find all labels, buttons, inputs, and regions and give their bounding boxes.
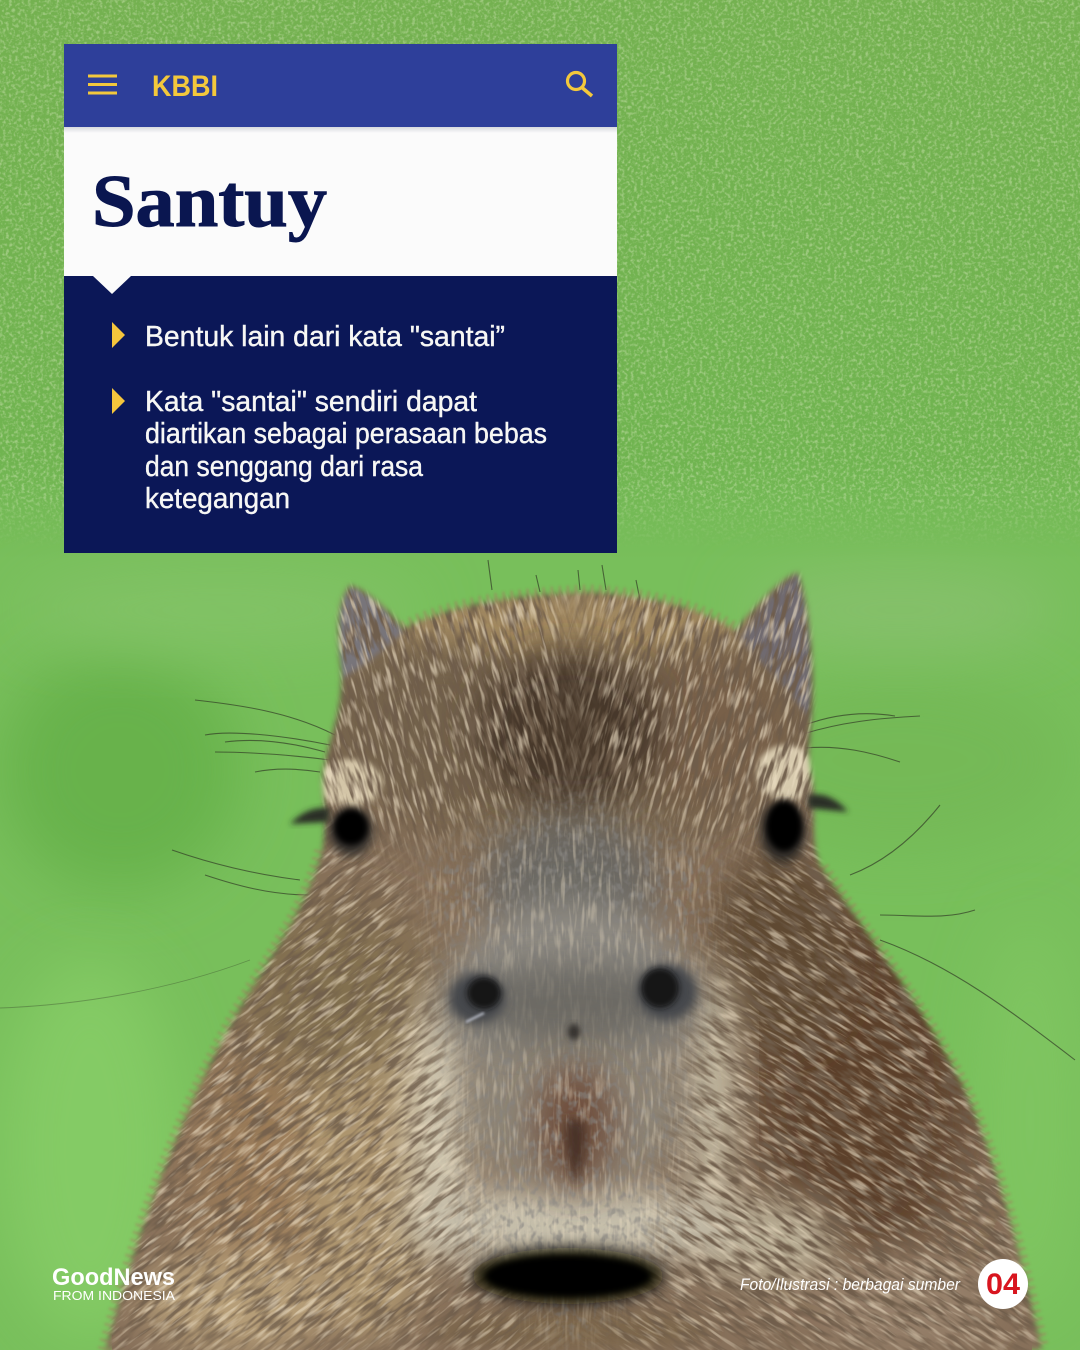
title panel (64, 127, 617, 276)
whiskers and stray hairs (0, 560, 1075, 1060)
app card (64, 44, 617, 553)
logo: GoodNews from Indonesia: GoodNews (52, 1264, 175, 1291)
app name: KBBI (152, 70, 218, 103)
icon: hamburger menu (88, 74, 117, 94)
icon: search (568, 72, 592, 96)
logo: GoodNews from Indonesia: FROM INDONESIA (53, 1289, 176, 1303)
eyes (290, 794, 848, 863)
card header bar (64, 44, 617, 127)
eyebrow patches (318, 759, 382, 807)
mouth (472, 1248, 664, 1304)
fur fringe around silhouette (105, 592, 1042, 1350)
heading: Santuy (92, 161, 327, 243)
photo credit: Foto/Ilustrasi : berbagai sumber (740, 1275, 961, 1294)
definition item 2: Kata "santai" sendiri dapat (145, 386, 477, 418)
nose and nostrils (447, 963, 697, 1185)
fur texture: right cheek (800, 1079, 801, 1081)
definition item 2: diartikan sebagai perasaan bebas (145, 418, 547, 450)
page number badge: 04 (986, 1268, 1020, 1301)
capybara photo illustration (0, 560, 1075, 1350)
definition item 2: ketegangan (145, 483, 290, 515)
page number badge (978, 1259, 1028, 1309)
definition item 2 (112, 386, 547, 515)
definition item 1: Bentuk lain dari kata "santai” (145, 321, 505, 353)
fur texture: left cheek (329, 1080, 331, 1081)
fur texture: right forehead (700, 700, 701, 701)
ears (337, 585, 404, 680)
fur texture: muzzle mottling (570, 1000, 571, 1001)
definition item 2: dan senggang dari rasa (145, 451, 424, 483)
definition panel (64, 276, 617, 553)
logo: GoodNews from Indonesia (52, 1264, 176, 1303)
fur texture: left forehead (450, 700, 451, 701)
notch (93, 276, 131, 294)
head silhouette with colour masses (90, 560, 1050, 1350)
